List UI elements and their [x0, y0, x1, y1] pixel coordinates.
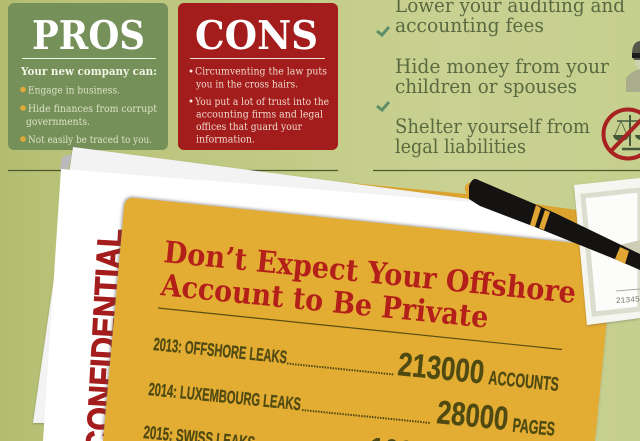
leak row 2014	[148, 379, 556, 441]
pros list: Not easily be traced to you.	[28, 134, 152, 146]
panel: pros	[8, 3, 168, 150]
leak row 2013	[153, 334, 560, 396]
leak row 2013: 2013: OFFSHORE LEAKS	[153, 334, 288, 367]
icon: no legal scales	[604, 110, 640, 158]
pros list: governments.	[26, 116, 90, 128]
folder title: Don’t Expect Your Offshore	[162, 235, 578, 311]
cons list: information.	[196, 134, 255, 146]
folder title: Account to Be Private	[158, 268, 490, 336]
leak row 2014: 28000	[435, 393, 510, 437]
pros intro: Your new company can:	[20, 64, 157, 78]
leak row 2015	[143, 422, 459, 441]
leak row 2014: 2014: LUXEMBOURG LEAKS	[148, 379, 302, 414]
paper: back sheet	[33, 147, 590, 423]
cons list: you in the cross hairs.	[195, 78, 298, 90]
icon: masked man	[626, 41, 640, 92]
cons list	[190, 66, 329, 146]
orange folder back	[340, 182, 577, 225]
benefits list: legal liabilities	[395, 134, 526, 158]
panel: cons	[178, 3, 338, 150]
divider lines	[8, 170, 640, 172]
benefits list: Hide money from your	[395, 54, 609, 78]
cons list: accounting firms and legal	[196, 108, 324, 120]
icon: check mark 2	[377, 102, 389, 110]
benefits list: accounting fees	[395, 13, 544, 37]
cons list: You put a lot of trust into the	[194, 96, 329, 108]
leak row 2013: 213000	[396, 345, 486, 391]
benefits list: children or spouses	[395, 74, 577, 98]
folder front	[103, 198, 614, 441]
benefits list: Shelter yourself from	[395, 114, 590, 138]
benefits list	[395, 0, 625, 158]
icon: pen	[465, 179, 640, 270]
leak row 2013: ACCOUNTS	[488, 367, 560, 396]
cons list: Circumventing the law puts	[195, 66, 327, 78]
pros list	[20, 84, 158, 146]
cons list: offices that guard your	[196, 121, 303, 133]
pros list: Engage in business.	[28, 84, 120, 96]
paper: front sheet	[43, 169, 585, 441]
icon: check mark 1	[377, 27, 389, 35]
pros list: Hide finances from corrupt	[28, 103, 158, 115]
certificate card	[574, 178, 640, 325]
heading: cons: CONS	[195, 13, 318, 59]
certificate number: 21345	[616, 295, 640, 306]
heading: pros: PROS	[32, 13, 145, 59]
